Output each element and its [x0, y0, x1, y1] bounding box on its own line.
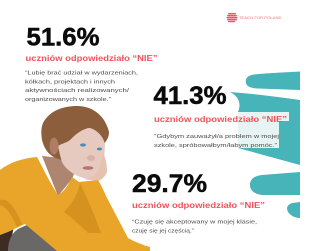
subheading: uczniów odpowiedziało “NIE” [154, 115, 287, 124]
subheading: uczniów odpowiedziało “NIE” [132, 201, 265, 210]
quote: czuję się jej częścią.” [132, 228, 194, 234]
nose [87, 155, 95, 161]
photo: girl in yellow sweater [0, 106, 150, 251]
quote: “Lubię brać udział w wydarzeniach, [25, 70, 138, 76]
subheading: uczniów odpowiedziało “NIE” [26, 54, 158, 63]
quote: “Czuję się akceptowany w mojej klasie, [132, 220, 257, 226]
face [58, 128, 105, 179]
number: 51.6% [26, 24, 100, 52]
quote: kółkach, projektach i innych [25, 79, 115, 85]
quote [25, 70, 138, 103]
quote [132, 220, 257, 234]
quote [154, 134, 279, 149]
neck [42, 156, 74, 196]
quote: szkole, spróbowałbym/łabym pomóc.” [154, 143, 277, 149]
grey skirt [8, 217, 92, 251]
mouth [82, 166, 94, 170]
hair [41, 106, 109, 160]
teal decorative shapes [230, 72, 300, 218]
quote: organizowanych w szkole.” [25, 97, 111, 103]
arm edge shading [0, 200, 22, 227]
statistic 1 [25, 24, 158, 103]
logo text: TEACH FOR POLAND [239, 15, 282, 20]
number: 41.3% [154, 82, 226, 110]
light gap under arm [65, 217, 90, 236]
icon: logo mark [226, 13, 238, 22]
eyes [80, 143, 102, 150]
dark lower garment [0, 226, 14, 251]
pale panel behind quote [238, 112, 289, 148]
statistic 3 [132, 170, 265, 234]
sweater shading [64, 183, 101, 233]
logo: Teach For Poland [226, 13, 282, 22]
hand [84, 153, 107, 181]
quote: aktywnościach realizowanych/ [25, 88, 129, 94]
number: 29.7% [132, 170, 207, 198]
quote: “Gdybym zauważył/a problem w mojej [154, 134, 279, 140]
sweater [0, 157, 150, 251]
statistic 2 [154, 82, 287, 149]
ear [50, 138, 58, 154]
